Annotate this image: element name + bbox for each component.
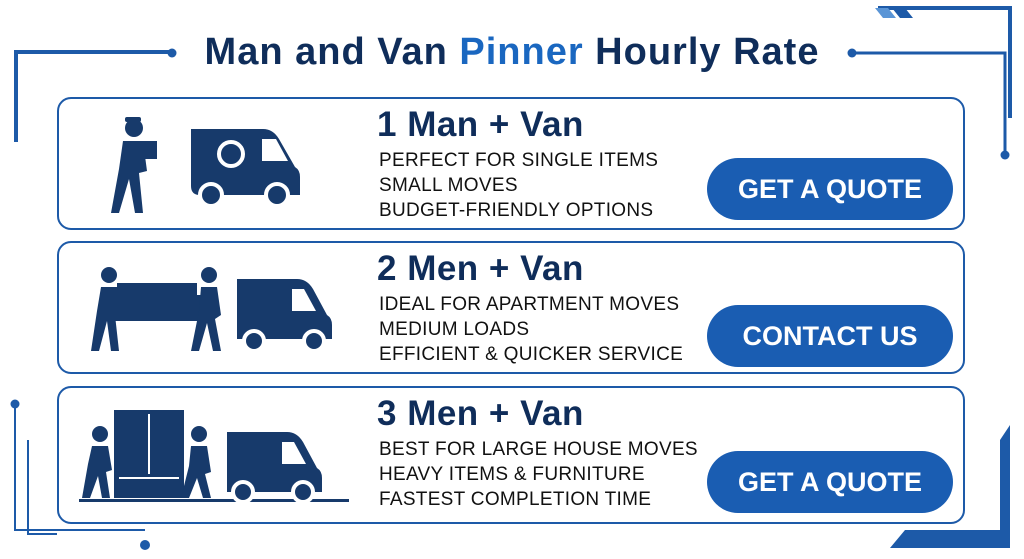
panel: 3 men + van bbox=[57, 386, 965, 524]
button bbox=[707, 305, 953, 367]
list bbox=[379, 439, 698, 510]
list: BEST FOR LARGE HOUSE MOVES bbox=[379, 439, 698, 460]
button: GET A QUOTE bbox=[738, 467, 922, 497]
button: GET A QUOTE bbox=[738, 174, 922, 204]
list: EFFICIENT & QUICKER SERVICE bbox=[379, 344, 683, 365]
list bbox=[379, 150, 658, 221]
list: SMALL MOVES bbox=[379, 175, 518, 196]
button bbox=[707, 158, 953, 220]
icon: two men with sofa and van bbox=[91, 267, 332, 351]
list: HEAVY ITEMS & FURNITURE bbox=[379, 464, 645, 485]
button bbox=[707, 451, 953, 513]
list: IDEAL FOR APARTMENT MOVES bbox=[379, 294, 679, 315]
icon: men with wardrobe and van bbox=[79, 410, 349, 502]
title: Man and Van Pinner Hourly Rate bbox=[205, 31, 819, 73]
list: PERFECT FOR SINGLE ITEMS bbox=[379, 150, 658, 171]
panel: 1 man + van bbox=[57, 97, 965, 230]
panel: 2 men + van bbox=[57, 241, 965, 374]
list bbox=[379, 294, 683, 365]
button: CONTACT US bbox=[742, 321, 918, 351]
heading: 2 Men + Van bbox=[377, 249, 584, 288]
heading: 3 Men + Van bbox=[377, 394, 584, 433]
list: BUDGET-FRIENDLY OPTIONS bbox=[379, 200, 653, 221]
heading: 1 Man + Van bbox=[377, 105, 584, 144]
list: MEDIUM LOADS bbox=[379, 319, 529, 340]
icon: man with box and van bbox=[111, 117, 300, 213]
list: FASTEST COMPLETION TIME bbox=[379, 489, 651, 510]
